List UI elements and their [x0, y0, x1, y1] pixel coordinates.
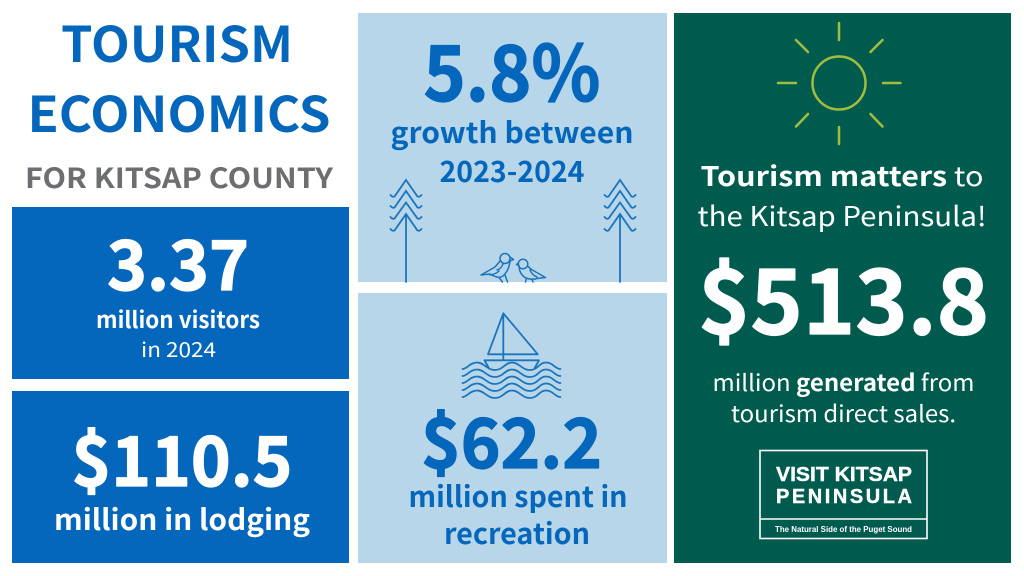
icon: sun — [778, 23, 900, 144]
panel: visitors — [12, 207, 349, 379]
title: TOURISM — [61, 6, 293, 77]
visitors year: in 2024 — [141, 334, 216, 363]
panel: lodging — [12, 391, 349, 563]
logo: VISIT KITSAP — [776, 464, 912, 486]
panel: growth — [358, 13, 667, 282]
headline: Tourism matters to — [700, 155, 984, 194]
logo: The Natural Side of the Puget Sound — [775, 525, 912, 534]
icon: tree right — [604, 180, 636, 282]
panel: total: the Kitsap Peninsula! — [698, 195, 986, 234]
total caption: million generated from — [712, 364, 974, 398]
panel: growth: 2023-2024 — [440, 149, 584, 191]
icon: birds — [481, 254, 546, 282]
logo: PENINSULA — [776, 486, 912, 508]
logo — [760, 450, 927, 538]
visitors label: million visitors — [96, 301, 260, 335]
panel: total — [674, 13, 1011, 563]
total number: $513.8 — [698, 230, 989, 360]
lodging label: million in lodging — [54, 497, 310, 539]
panel: recreation — [358, 293, 667, 563]
lodging number: $110.5 — [72, 406, 292, 506]
recreation label: million spent in — [408, 474, 628, 516]
subtitle: FOR KITSAP COUNTY — [25, 157, 334, 197]
panel: recreation: recreation — [444, 511, 590, 553]
panel: total: tourism direct sales. — [731, 395, 956, 429]
icon: tree left — [390, 180, 422, 282]
visitors number: 3.37 — [107, 210, 249, 310]
growth number: 5.8% — [424, 13, 600, 124]
growth label: growth between — [390, 110, 634, 152]
title: ECONOMICS — [28, 76, 330, 147]
title — [28, 6, 330, 147]
icon: sailboat — [462, 313, 560, 398]
recreation number: $62.2 — [421, 388, 602, 488]
